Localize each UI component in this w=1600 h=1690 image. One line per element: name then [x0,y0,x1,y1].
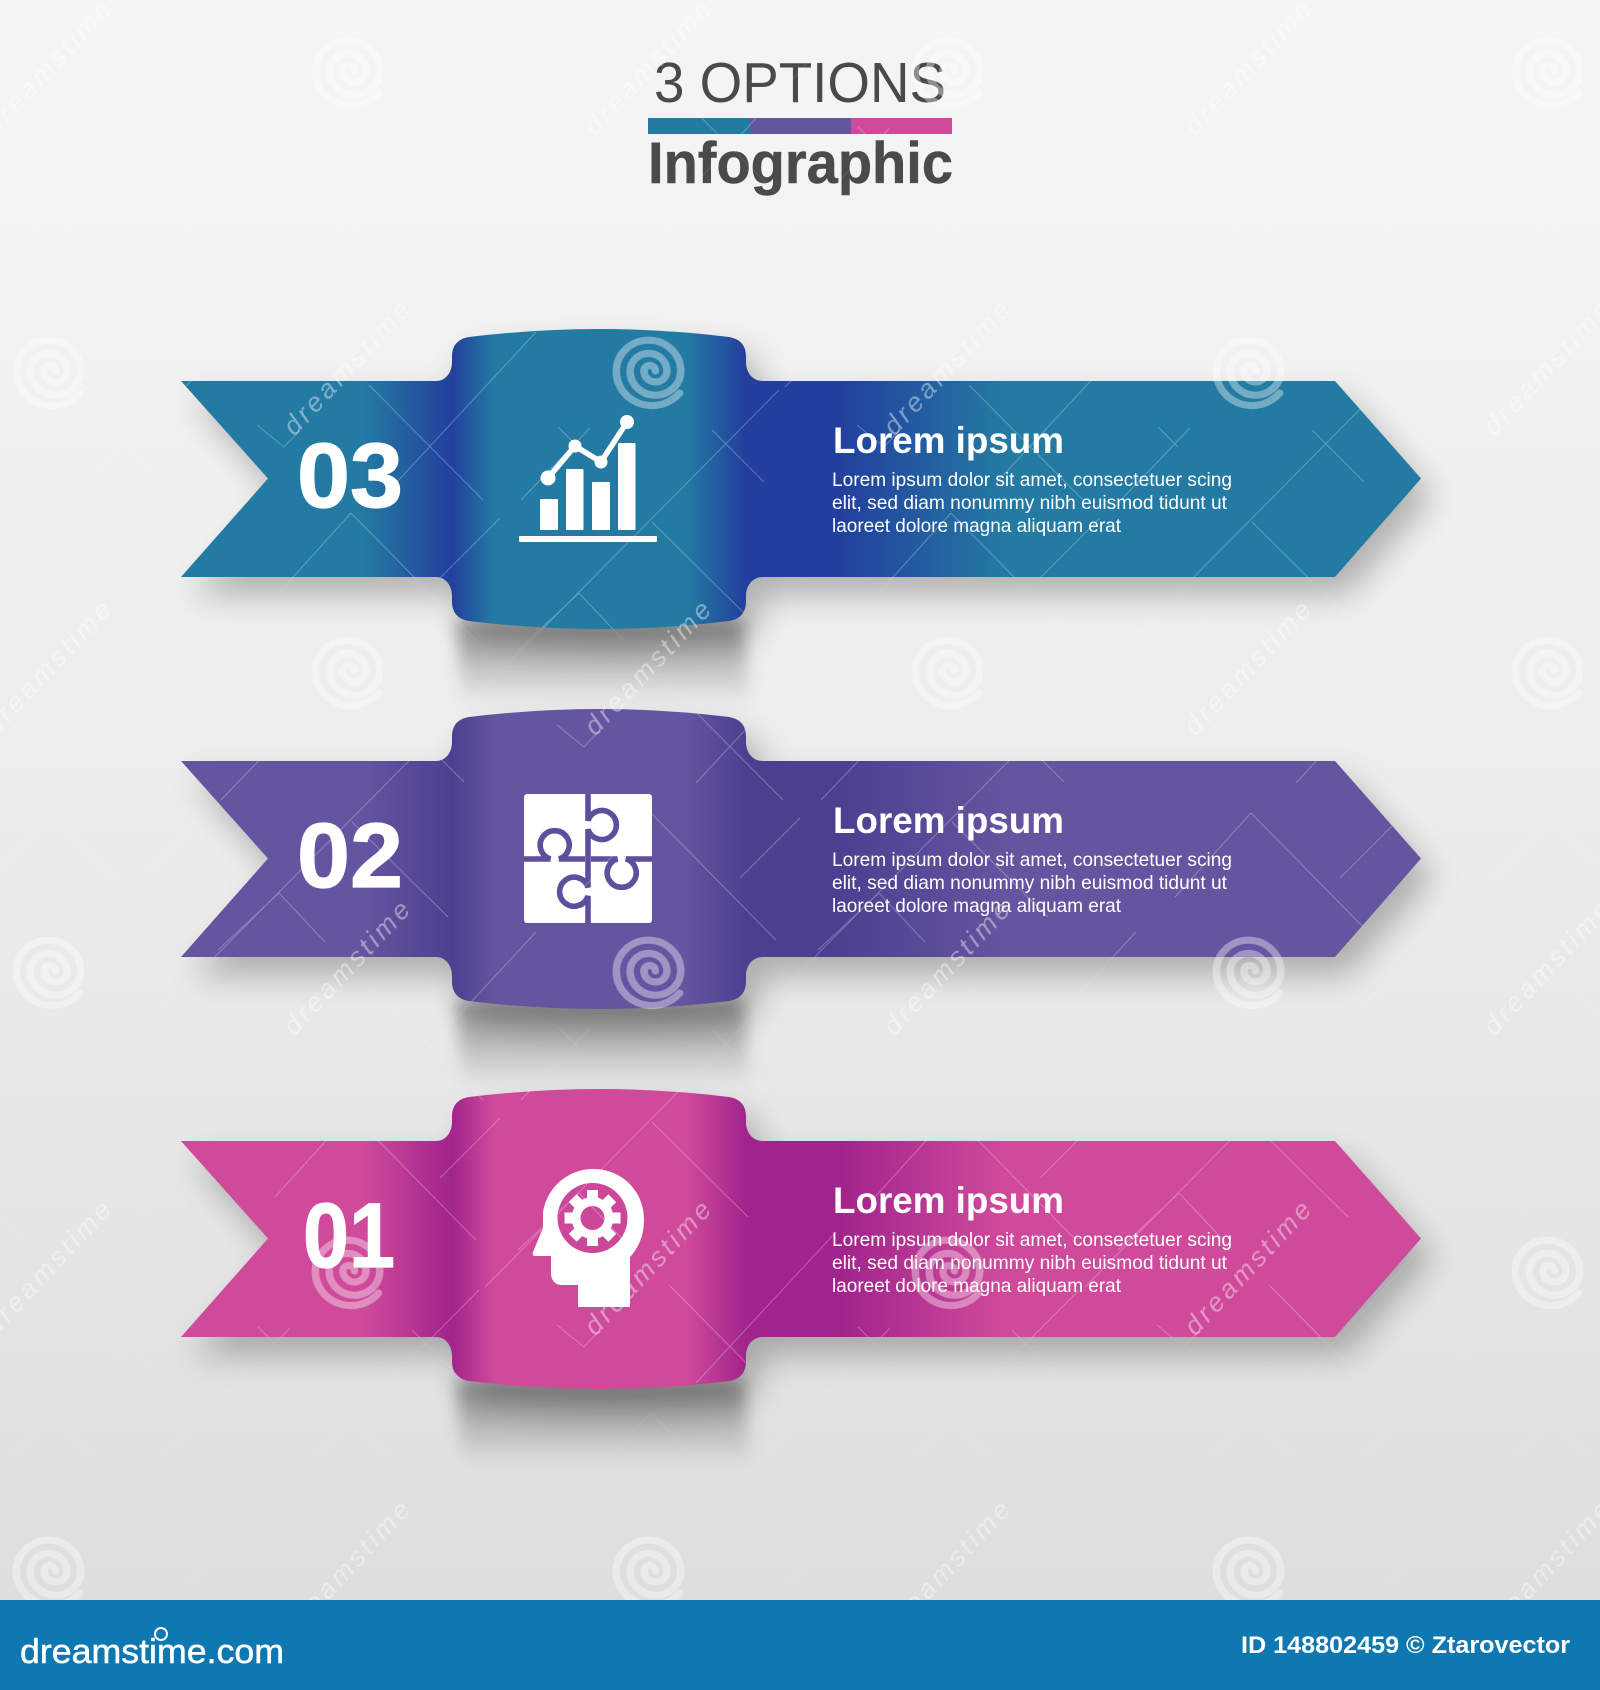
watermark overlay: dreamstime [578,1195,717,1341]
ribbon arrow 01 [181,1089,1421,1389]
number 01: 01 [303,1185,395,1287]
icon: puzzle pieces [524,794,652,923]
text block 02: Lorem ipsum [833,800,1064,841]
text block 01: elit, sed diam nonummy nibh euismod tidunt ut [832,1252,1228,1274]
panel: option 01 [181,1089,1433,1466]
tricolour title bar [648,118,952,134]
text block 03: Lorem ipsum [833,420,1064,461]
watermark overlay: dreamstime [277,295,416,441]
text block 01: Lorem ipsum dolor sit amet, consectetuer scing [832,1229,1232,1251]
text block 01: laoreet dolore magna aliquam erat [832,1275,1122,1297]
ribbon arrow 03 [181,329,1421,629]
title line: Infographic: Infographic [648,131,953,196]
watermark overlay: dreamstime [578,595,717,741]
text block 02: Lorem ipsum dolor sit amet, consectetuer scing [832,849,1232,871]
text block 02 [832,800,1232,917]
watermark overlay: dreamstime [1178,595,1317,741]
footer bar [0,1600,1600,1690]
footer logo: dreamstime.com [20,1633,284,1671]
ribbon shadow 03 [193,347,1433,706]
icon: head with gear [533,1169,644,1307]
watermark overlay: dreamstime [877,295,1016,441]
ribbon arrow 02 [181,709,1421,1009]
panel: option 02 [181,709,1433,1086]
watermark overlay: dreamstime [1178,1195,1317,1341]
text block 02: laoreet dolore magna aliquam erat [832,895,1122,917]
text block 03: laoreet dolore magna aliquam erat [832,515,1122,537]
text block 01: Lorem ipsum [833,1180,1064,1221]
ribbon shadow 02 [193,727,1433,1086]
watermark overlay: dreamstime [877,1495,1016,1641]
watermark overlay: dreamstime [277,1495,416,1641]
text block 03: elit, sed diam nonummy nibh euismod tidunt ut [832,492,1228,514]
title line: 3 OPTIONS: 3 OPTIONS [654,51,946,115]
ribbon shadow 01 [193,1107,1433,1466]
panel: option 03 [181,329,1433,706]
text block 02: elit, sed diam nonummy nibh euismod tidunt ut [832,872,1228,894]
text block 01 [832,1180,1232,1297]
watermark overlay: dreamstime [277,895,416,1041]
title [648,51,953,196]
footer credit: ID 148802459 © Ztarovector [1241,1632,1570,1659]
text block 03: Lorem ipsum dolor sit amet, consectetuer scing [832,469,1232,491]
number 03: 03 [297,425,403,527]
number 02: 02 [297,805,403,907]
text block 03 [832,420,1232,537]
watermark overlay: dreamstime [877,895,1016,1041]
icon: bar chart with trend line [519,415,657,542]
